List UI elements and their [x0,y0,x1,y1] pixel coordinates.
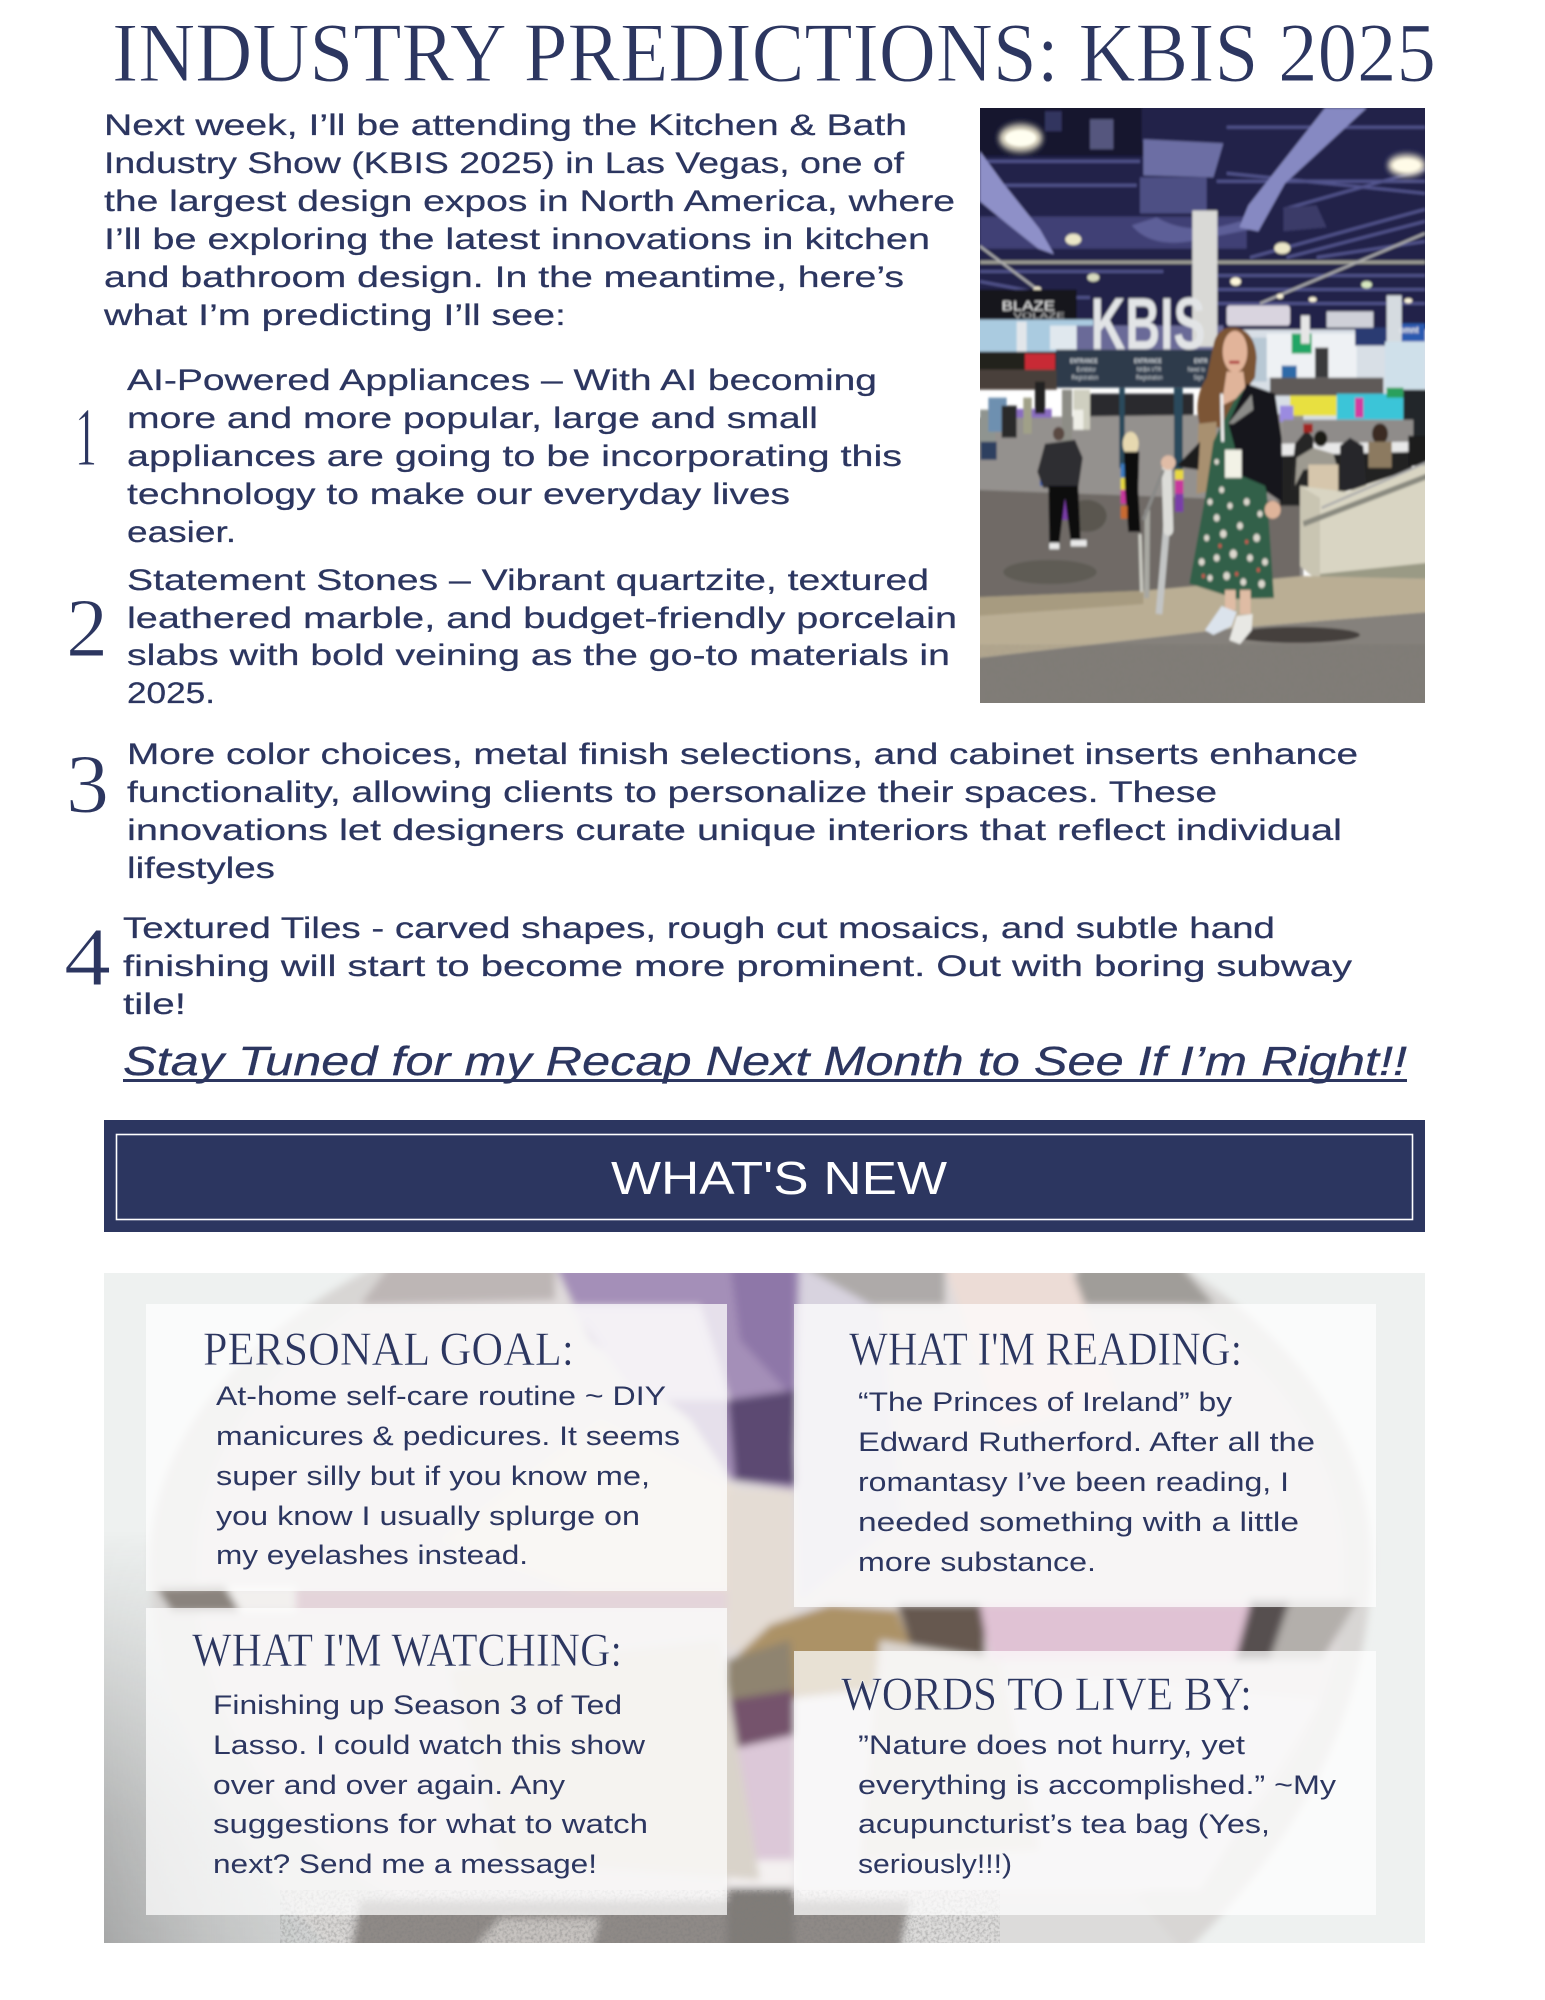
list item 3 [66,738,1358,885]
body: needed something with a little [858,1507,1299,1537]
heading: WHAT I'M WATCHING: [192,1624,622,1677]
ceiling [977,104,1428,332]
item 1 text: easier. [127,516,236,549]
item 1 text: AI-Powered Appliances – With AI becoming [127,364,877,397]
panel: what I'm reading [794,1304,1376,1607]
body: everything is accomplished.” ~My [858,1770,1337,1800]
body: acupuncturist’s tea bag (Yes, [858,1809,1270,1839]
body: Finishing up Season 3 of Ted [213,1690,622,1720]
panel: what I'm watching [146,1608,727,1915]
intro paragraph: I’ll be exploring the latest innovations in kitchen [104,223,930,256]
body [858,1730,1337,1879]
intro paragraph: what I’m predicting I’ll see: [103,299,566,332]
body [213,1690,648,1879]
bowl [150,1265,1371,1953]
ceiling lights [999,124,1425,303]
body: more substance. [858,1547,1096,1577]
item 2 text [127,564,957,710]
item 1 text: more and more popular, large and small [127,402,818,435]
hall back and floor [1090,394,1193,418]
heading: PERSONAL GOAL: [203,1323,574,1376]
intro paragraph [103,109,955,332]
item 3 text [127,738,1358,885]
man in black [1037,427,1087,549]
body: super silly but if you know me, [216,1461,650,1491]
body: Lasso. I could watch this show [213,1730,646,1760]
numeral 2: 2 [66,582,108,675]
body: seriously!!!) [858,1849,1012,1879]
stair wall and rail [1300,464,1428,583]
photo: designer at KBIS entrance: ENTR [1194,359,1208,365]
photo: designer at KBIS entrance: Exhibitor [1077,367,1096,374]
body: ”Nature does not hurry, yet [858,1730,1246,1760]
stair railing [1139,510,1155,598]
steps [977,576,1428,658]
item 3 text: functionality, allowing clients to personalize their spaces. These [127,776,1217,809]
rose crystal top [950,1273,1088,1307]
photo: designer at KBIS entrance: Registration [1136,375,1163,382]
body: my eyelashes instead. [216,1540,528,1570]
item 1 text: technology to make our everyday lives [127,478,790,511]
item 3 text: lifestyles [127,852,275,885]
body: “The Princes of Ireland” by [858,1387,1233,1417]
item 2 text: Statement Stones – Vibrant quartzite, textured [127,564,929,597]
numeral 1: 1 [75,391,97,484]
body: At-home self-care routine ~ DIY [216,1381,666,1411]
photo: designer at KBIS entrance: BLAZE [1002,298,1055,314]
item 1 text [127,364,902,549]
photo: designer at KBIS entrance [980,108,1425,703]
banner: what's new: WHAT'S NEW [611,1152,948,1204]
body: suggestions for what to watch [213,1809,648,1839]
blonde visitor [1121,432,1141,532]
item 4 text: Textured Tiles - carved shapes, rough cut mosaics, and subtle hand [123,912,1275,945]
list item 1 [75,364,902,549]
photo: designer at KBIS entrance: Sign [1193,375,1203,382]
item 2 text: leathered marble, and budget-friendly porcelain [127,602,957,635]
body: Edward Rutherford. After all the [858,1427,1315,1457]
panel: personal goal [146,1304,727,1591]
item 2 text: 2025. [127,677,215,710]
photo: designer at KBIS entrance: ENTRANCE [1134,359,1162,365]
intro paragraph: the largest design expos in North America, where [104,185,955,218]
item 4 text: tile! [123,988,186,1021]
body: over and over again. Any [213,1770,566,1800]
panel: words to live by [794,1651,1376,1915]
left crowd [977,370,1090,460]
list item 2 [66,564,957,710]
KBIS letters: KBIS [1091,284,1206,365]
heading: WHAT I'M READING: [849,1323,1242,1376]
item 1 text: appliances are going to be incorporating this [127,440,902,473]
woman in floral dress [1161,327,1282,644]
intro paragraph: and bathroom design. In the meantime, here’s [104,261,904,294]
item 4 text [123,912,1352,1021]
banner: what's new [104,1120,1425,1232]
amethyst [555,1265,800,1490]
body: manicures & pedicures. It seems [216,1421,680,1451]
outer band rim [157,1586,240,1612]
mid band: exhibit hall [1220,330,1428,422]
heading: WORDS TO LIVE BY: [841,1668,1252,1721]
list item 4 [64,911,1352,1021]
numeral 3: 3 [66,738,109,831]
sign: Blaze [977,290,1077,320]
photo: designer at KBIS entrance: NKBA VTR [1137,367,1161,374]
body: next? Send me a message! [213,1849,597,1879]
panel: what's new background of crystals in a bowl [104,1265,1425,1953]
body: you know I usually splurge on [216,1501,640,1531]
intro paragraph: Next week, I’ll be attending the Kitchen & Bath [104,109,907,142]
photo: designer at KBIS entrance: omnt [1399,324,1419,335]
photo: designer at KBIS entrance: ENTRANCE [1070,359,1098,365]
body [858,1387,1315,1577]
call to action: Stay Tuned for my Recap Next Month to See If I’m Right!! [123,1038,1407,1084]
item 4 text: finishing will start to become more prominent. Out with boring subway [123,950,1352,983]
right crowd, neon booth [1280,388,1428,506]
item 3 text: More color choices, metal finish selections, and cabinet inserts enhance [127,738,1358,771]
plum and pink lower crystals [727,1690,794,1750]
item 2 text: slabs with bold veining as the go-to materials in [127,639,950,672]
body: romantasy I’ve been reading, I [858,1467,1289,1497]
intro paragraph: Industry Show (KBIS 2025) in Las Vegas, one of [104,147,905,180]
photo: designer at KBIS entrance: Registration [1072,375,1098,382]
title: INDUSTRY PREDICTIONS: KBIS 2025 [112,6,1436,100]
bowl bottom [348,1897,911,1943]
numeral 4: 4 [64,911,111,1004]
gold stone [727,1605,916,1700]
column [1192,211,1217,347]
item 3 text: innovations let designers curate unique interiors that reflect individual [127,814,1342,847]
photo: designer at KBIS entrance: VOLAZE [1013,311,1065,321]
body [216,1381,680,1570]
entrance sign [1056,350,1213,388]
photo: designer at KBIS entrance: Need to [1188,367,1205,374]
